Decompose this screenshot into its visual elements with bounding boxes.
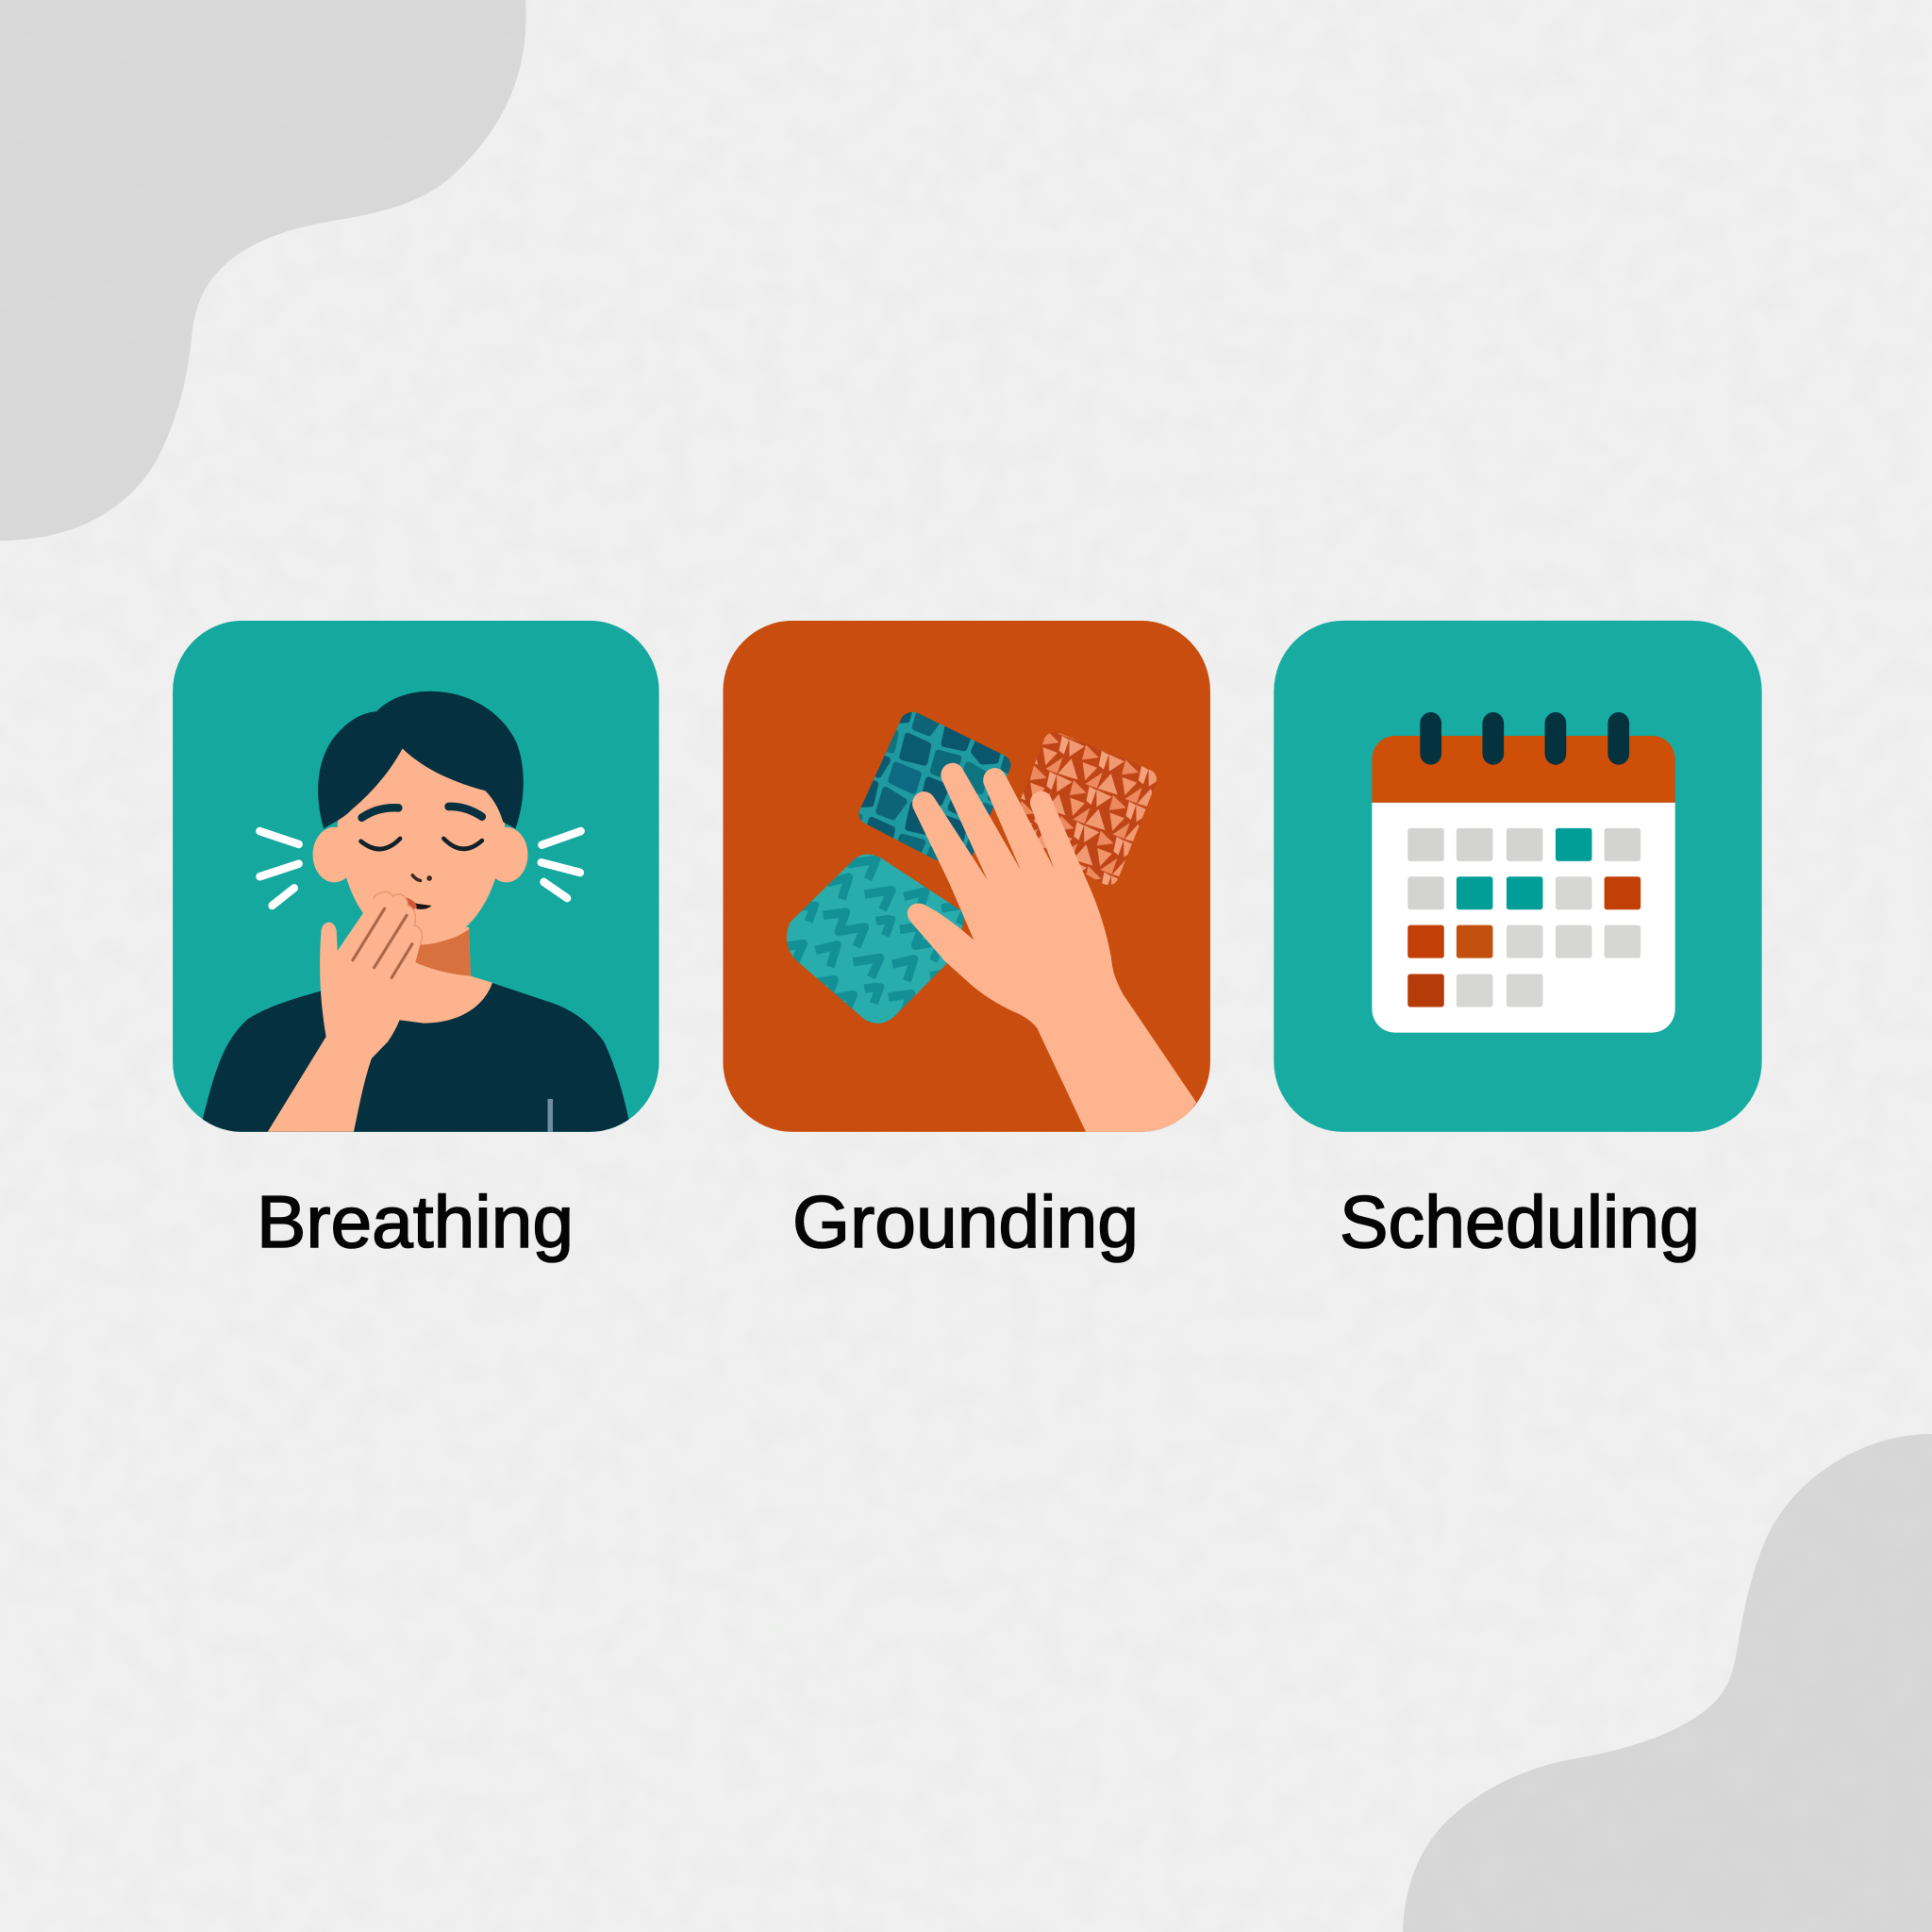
closed eyes and brows [360, 807, 482, 849]
texture card: teal [787, 855, 966, 1024]
label: Breathing: Breathing [257, 1180, 574, 1263]
panel: scheduling icon [1274, 621, 1762, 1132]
neck [397, 927, 492, 1024]
ears [313, 827, 528, 882]
nose and mouth [406, 875, 432, 912]
calendar rings [1420, 712, 1629, 765]
hair [318, 691, 524, 829]
panel: breathing icon [173, 621, 659, 1132]
face [338, 739, 505, 944]
calendar header [1372, 736, 1675, 803]
decorative grey blob: top left [0, 0, 526, 541]
texture card: dark teal [858, 712, 1011, 863]
breath lines [259, 831, 581, 906]
decorative grey blob: bottom right [1403, 1434, 1932, 1932]
hand on textures [908, 763, 1196, 1132]
shirt [201, 983, 631, 1132]
panel: grounding icon [723, 621, 1210, 1132]
calendar day cells [1407, 828, 1641, 1007]
label: Grounding: Grounding [792, 1180, 1139, 1263]
label: Scheduling: Scheduling [1340, 1180, 1700, 1263]
texture card: orange [1019, 732, 1157, 885]
hand at mouth [268, 891, 423, 1132]
calendar page [1372, 803, 1675, 1033]
